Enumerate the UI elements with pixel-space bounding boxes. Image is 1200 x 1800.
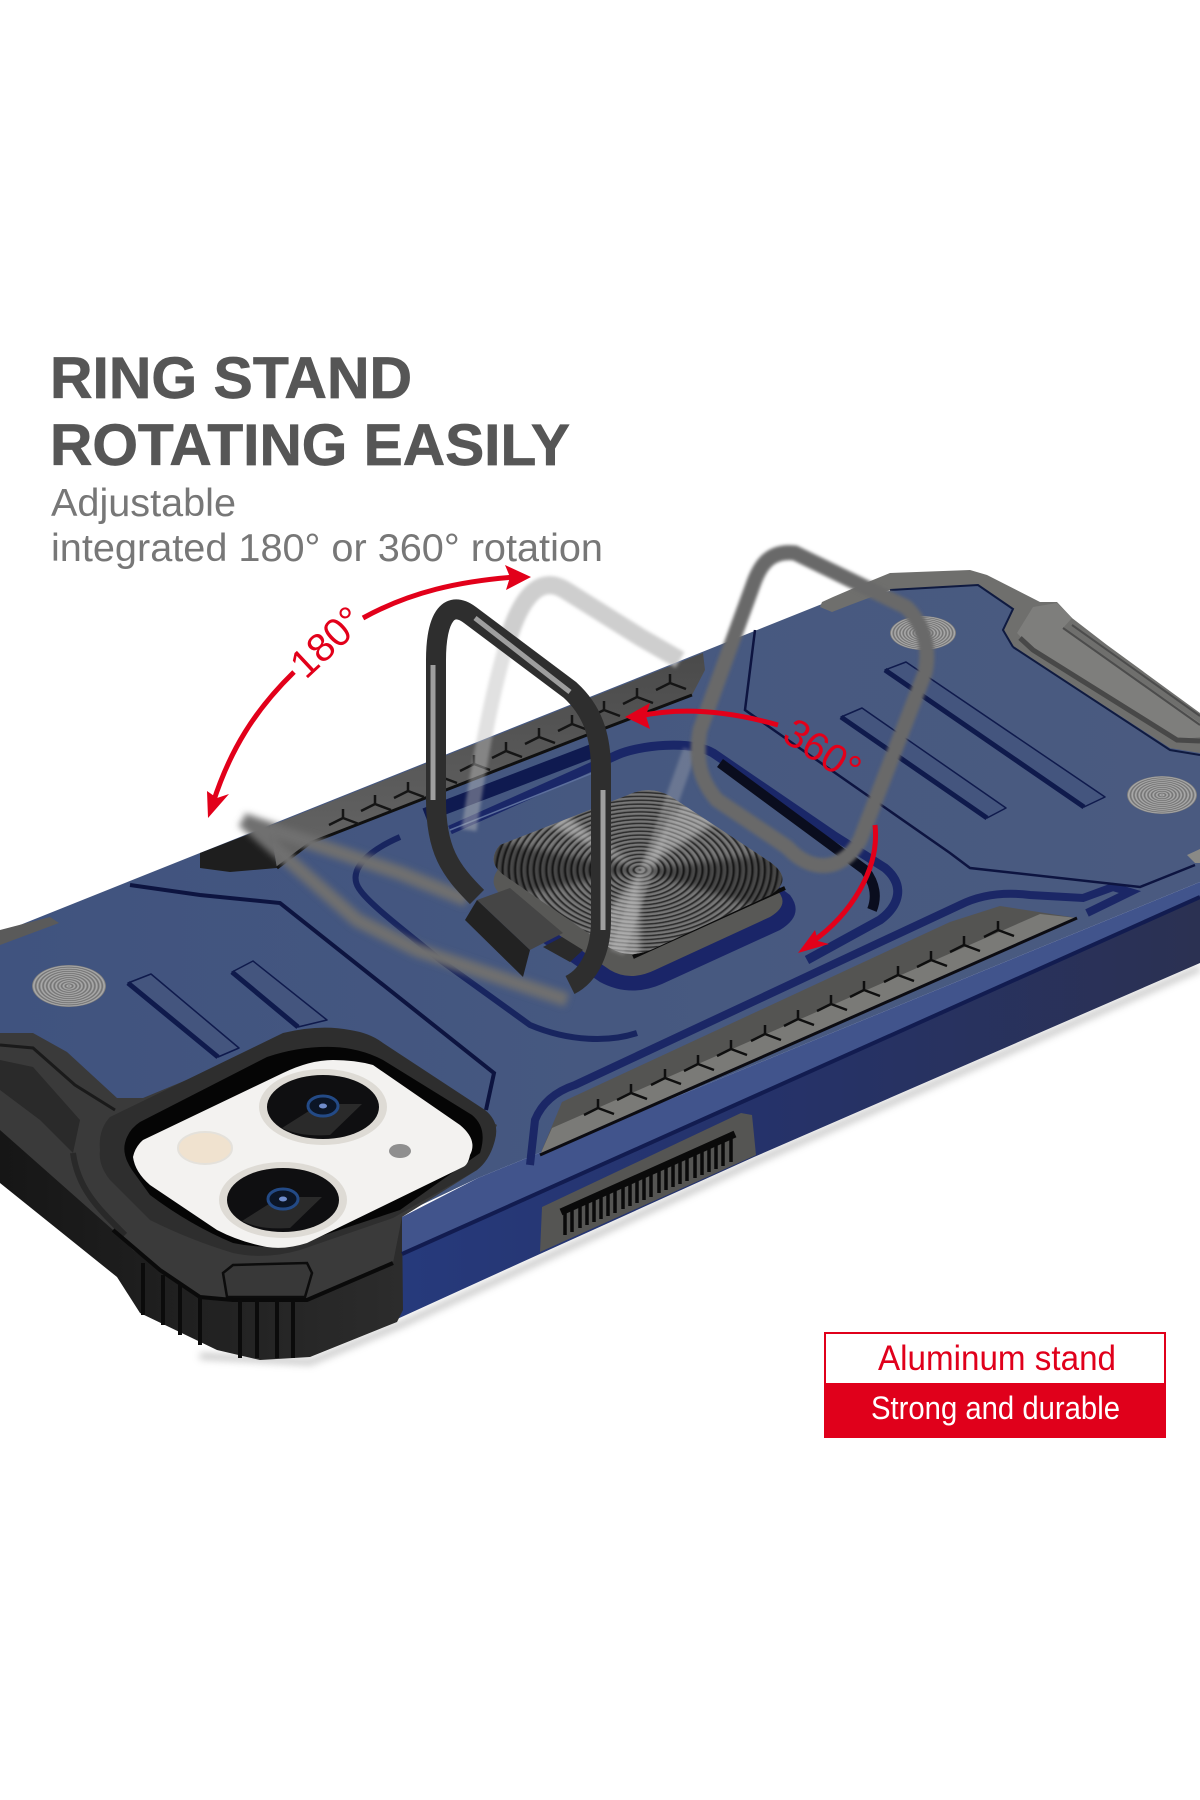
light side band	[402, 882, 1200, 1254]
top rubber grip	[200, 653, 705, 872]
spun metal disc	[494, 790, 782, 954]
corner ridges	[143, 1263, 293, 1358]
navy recess	[499, 880, 796, 991]
heading	[50, 346, 570, 478]
180 degree arrow	[207, 565, 531, 818]
left black bumper	[0, 917, 497, 1358]
bottom rubber grip	[530, 887, 1130, 1165]
ghost ring motion trail	[469, 585, 690, 953]
metal coins	[32, 616, 1197, 1007]
subheading: integrated 180° or 360° rotation	[51, 527, 603, 570]
back face of case	[0, 575, 1200, 1230]
hinge	[465, 888, 583, 977]
side button port	[540, 1113, 756, 1252]
corner edge	[113, 1230, 393, 1300]
grip marks	[329, 674, 686, 825]
frame	[100, 1028, 496, 1256]
camera island	[100, 1028, 496, 1256]
right blurred ring	[698, 553, 927, 866]
phone case illustration	[0, 553, 1200, 1362]
callout: aluminum stand: Strong and durable	[871, 1390, 1120, 1426]
360 degree arrow	[625, 703, 876, 953]
subheading: Adjustable	[51, 482, 236, 525]
grip marks	[584, 921, 1014, 1115]
recessed magnet well	[356, 745, 898, 1039]
corner block	[223, 1263, 312, 1297]
ground shadow	[200, 968, 1200, 1362]
black corner side	[0, 1100, 403, 1360]
180 label: 180°	[282, 598, 372, 687]
standing ring	[433, 609, 603, 985]
infographic canvas	[0, 356, 1200, 1438]
magnet plate	[494, 790, 796, 990]
flat ring motion blur	[243, 820, 567, 1000]
side dark line	[402, 897, 1200, 1254]
subheading	[51, 482, 603, 570]
white glass	[133, 1060, 472, 1248]
slots	[128, 662, 1105, 1057]
microphone	[389, 1144, 411, 1158]
callout: aluminum stand	[824, 1333, 1166, 1438]
lower lens	[219, 1162, 347, 1238]
heading: RING STAND	[50, 346, 412, 411]
heading: ROTATING EASILY	[50, 413, 570, 478]
360 label: 360°	[775, 710, 869, 792]
plate outlines	[130, 630, 1195, 1110]
right grey bumper	[820, 570, 1200, 863]
upper lens	[259, 1069, 387, 1145]
callout: aluminum stand: Aluminum stand	[878, 1339, 1116, 1378]
case side wall	[395, 890, 1200, 1320]
flash	[178, 1132, 232, 1164]
base side	[494, 812, 782, 976]
